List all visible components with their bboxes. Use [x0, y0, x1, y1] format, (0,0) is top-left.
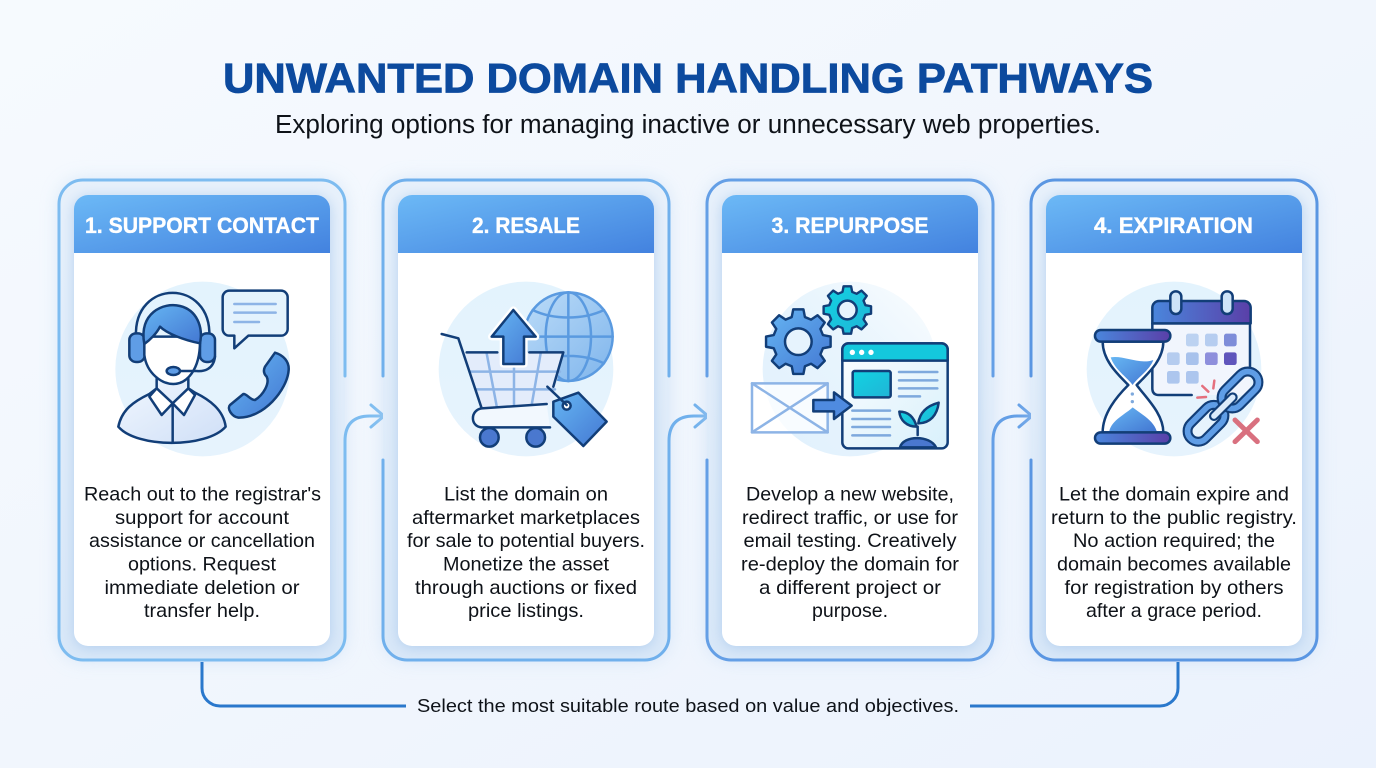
card 3 header — [722, 195, 978, 253]
card 2 — [398, 195, 654, 646]
body text 3: purpose. — [812, 600, 888, 622]
heading 3: 3. REPURPOSE — [772, 213, 928, 238]
body text 2 — [407, 484, 645, 622]
heading 1: 1. SUPPORT CONTACT — [85, 213, 320, 238]
panel: 4 expiration — [1031, 180, 1317, 660]
body text 3 — [741, 484, 960, 622]
body text 4: Let the domain expire and — [1059, 484, 1289, 506]
footer note: Select the most suitable route based on value and objectives. — [417, 696, 959, 716]
panel: 1 support contact — [59, 180, 384, 660]
body text 1: assistance or cancellation — [89, 530, 315, 552]
body text 4: for registration by others — [1064, 577, 1284, 599]
heading 2: 2. RESALE — [472, 213, 580, 238]
panel 4 frame — [1031, 180, 1317, 660]
body text 2: aftermarket marketplaces — [412, 507, 640, 529]
body text 3: email testing. Creatively — [744, 530, 957, 552]
panel 3 frame and connector arrow — [707, 180, 1032, 660]
body text 2: for sale to potential buyers. — [407, 530, 645, 552]
panel: 2 resale — [383, 180, 708, 660]
card 1 header — [74, 195, 330, 253]
subtitle: Exploring options for managing inactive or unnecessary web properties. — [275, 111, 1101, 139]
body text 1: options. Request — [128, 554, 277, 576]
body text 3: re-deploy the domain for — [741, 554, 960, 576]
footer bracket connector — [202, 662, 1178, 706]
card 1 — [74, 195, 330, 646]
icon: support agent with chat and phone — [115, 282, 290, 456]
icon: gears, envelope and website window — [752, 282, 948, 456]
body text 3: a different project or — [759, 577, 942, 599]
body text 4 — [1051, 484, 1297, 622]
body text 1 — [84, 484, 321, 622]
title: UNWANTED DOMAIN HANDLING PATHWAYS — [223, 54, 1153, 102]
body text 4: after a grace period. — [1086, 600, 1262, 622]
card 3 — [722, 195, 978, 646]
icon: hourglass, calendar and broken chain — [1087, 282, 1263, 456]
panel 2 frame and connector arrow — [383, 180, 708, 660]
body text 4: No action required; the — [1073, 530, 1275, 552]
panel 1 frame and connector arrow — [59, 180, 384, 660]
body text 2: List the domain on — [444, 484, 608, 506]
body text 1: immediate deletion or — [104, 577, 300, 599]
card 4 — [1046, 195, 1302, 646]
card 4 header — [1046, 195, 1302, 253]
body text 3: redirect traffic, or use for — [742, 507, 959, 529]
body text 2: Monetize the asset — [443, 554, 610, 576]
body text 3: Develop a new website, — [746, 484, 954, 506]
body text 1: Reach out to the registrar's — [84, 484, 321, 506]
body text 4: domain becomes available — [1057, 554, 1291, 576]
icon: shopping cart, globe and price tag — [439, 282, 613, 456]
body text 4: return to the public registry. — [1051, 507, 1297, 529]
panel: 3 repurpose — [707, 180, 1032, 660]
body text 1: transfer help. — [144, 600, 260, 622]
body text 1: support for account — [115, 507, 290, 529]
heading 4: 4. EXPIRATION — [1094, 213, 1253, 238]
body text 2: price listings. — [468, 600, 584, 622]
card 2 header — [398, 195, 654, 253]
body text 2: through auctions or fixed — [415, 577, 637, 599]
